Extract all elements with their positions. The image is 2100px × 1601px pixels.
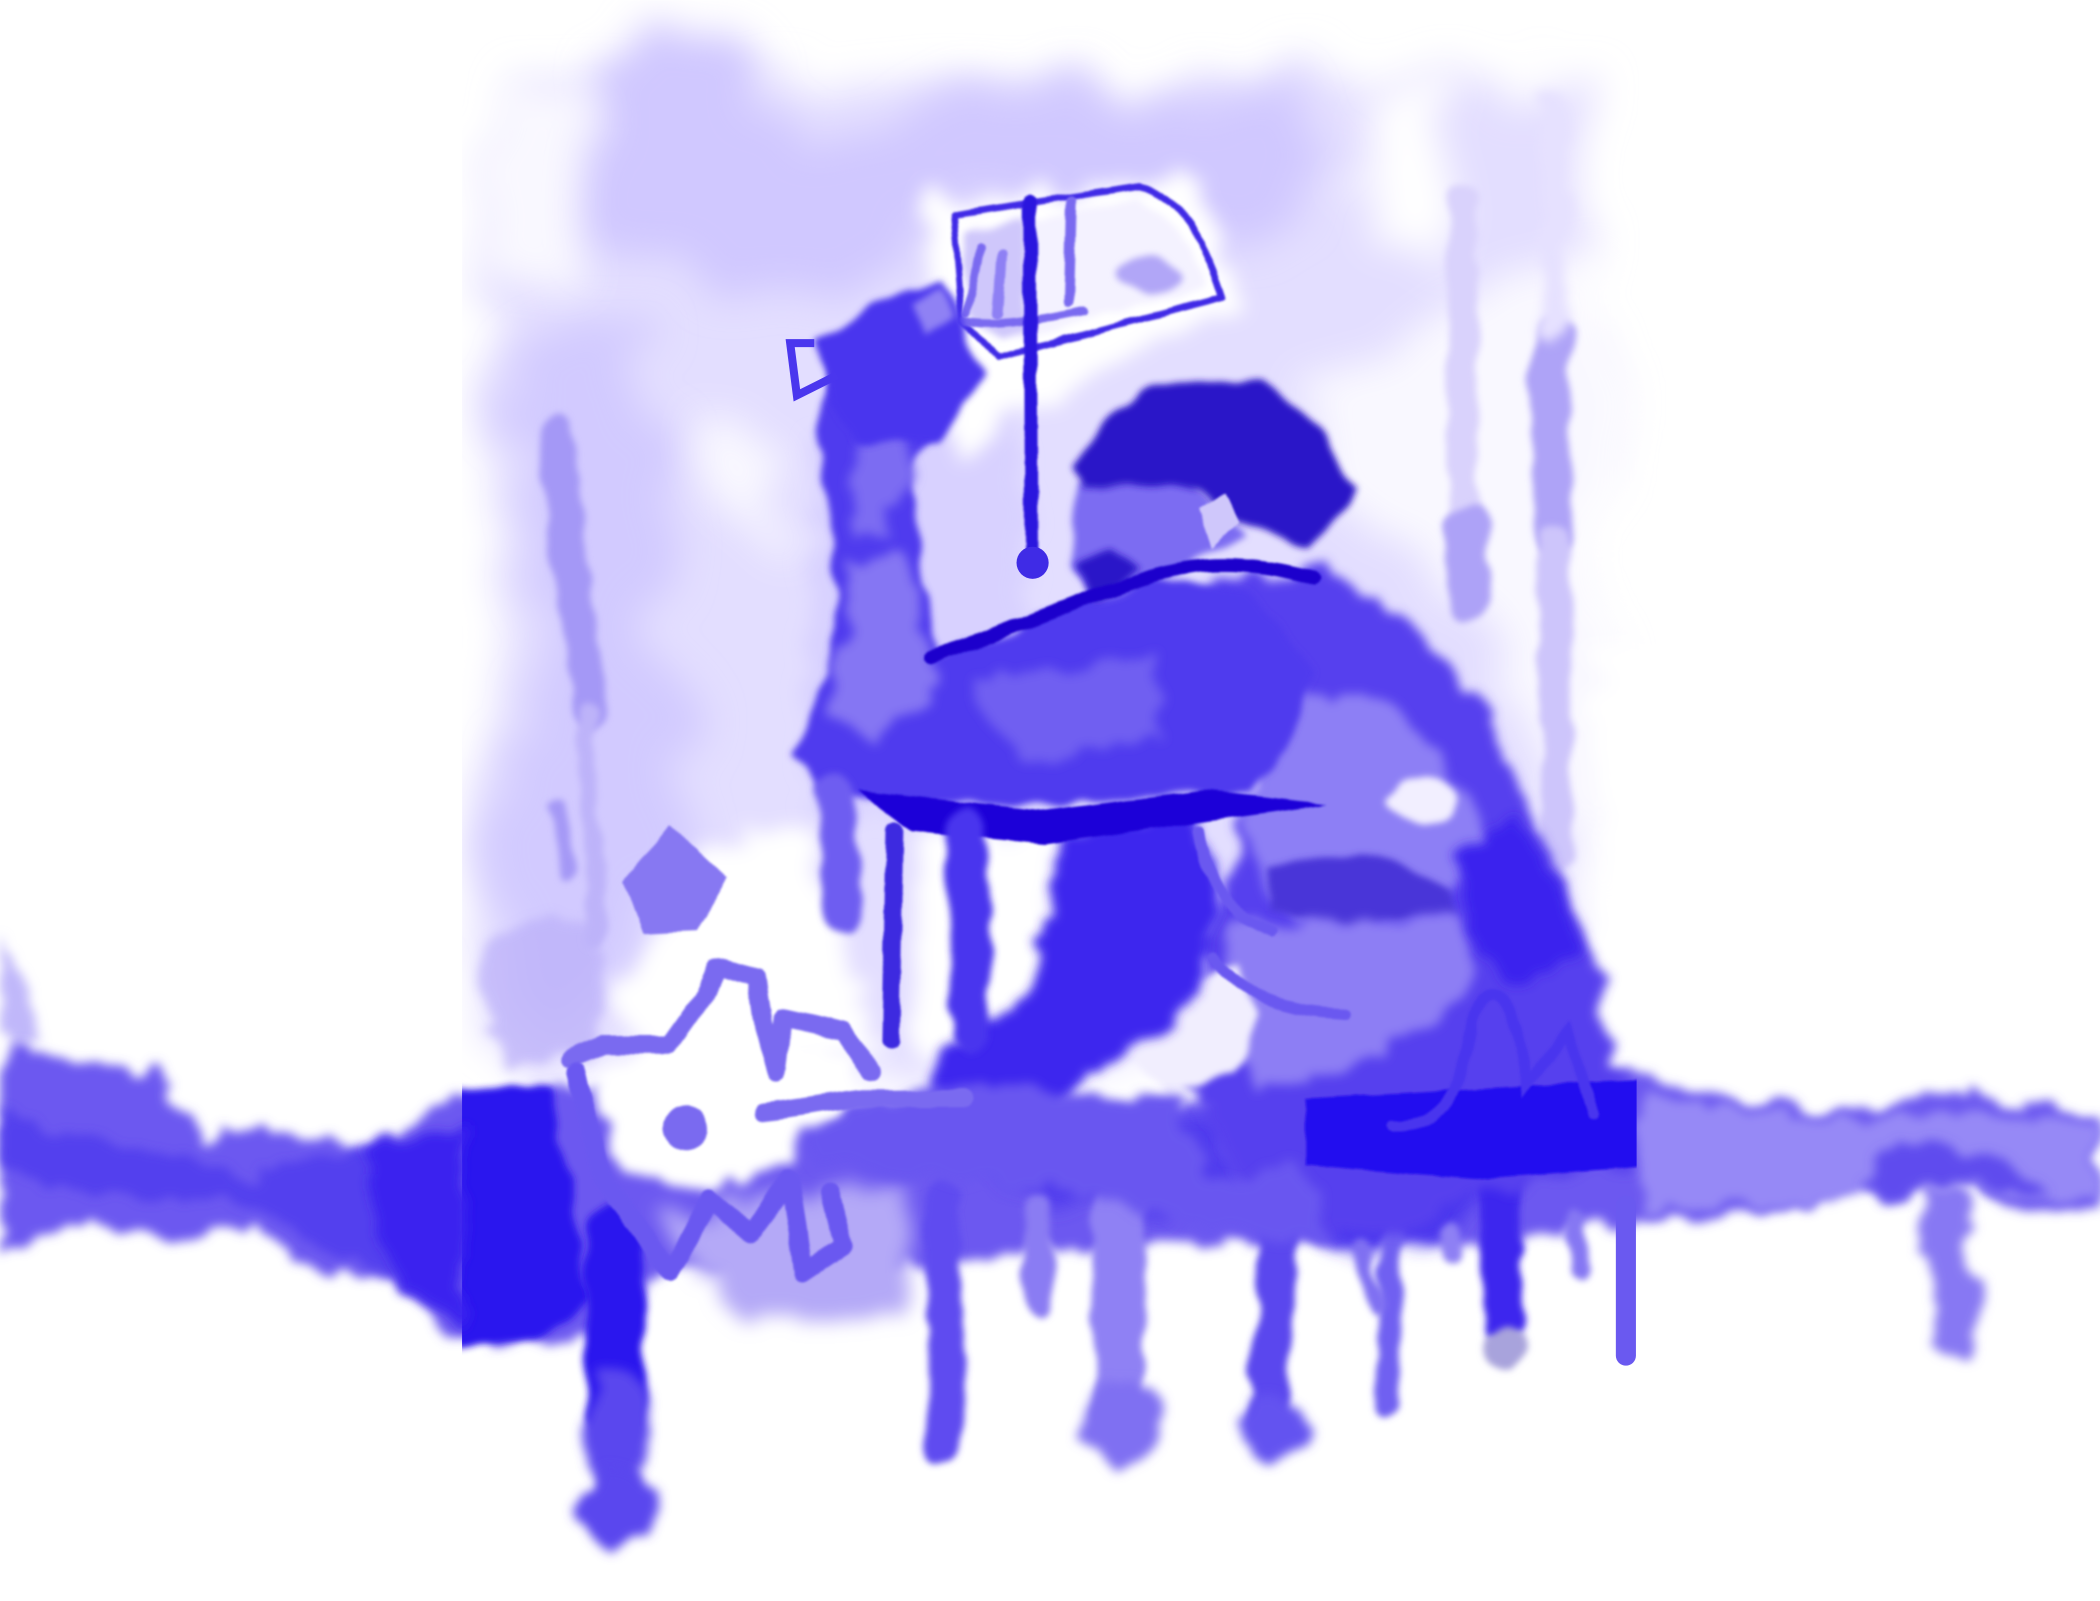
figure fist [790, 282, 984, 442]
figure arm and leg [790, 308, 1339, 1246]
right side drip [1941, 1206, 1960, 1340]
figure torso [1125, 569, 1661, 1239]
pentagon paint blotch [624, 824, 727, 934]
paint drips [579, 1179, 1626, 1547]
background vertical streaks [552, 107, 1558, 938]
horizon paint band [0, 931, 2100, 1346]
gloved hand outline [569, 967, 964, 1273]
background wash [475, 34, 1754, 1072]
icon: axe head [954, 186, 1223, 579]
figure head [931, 379, 1355, 657]
arm drips [837, 790, 970, 1042]
figure limb outlines [1199, 831, 1594, 1125]
